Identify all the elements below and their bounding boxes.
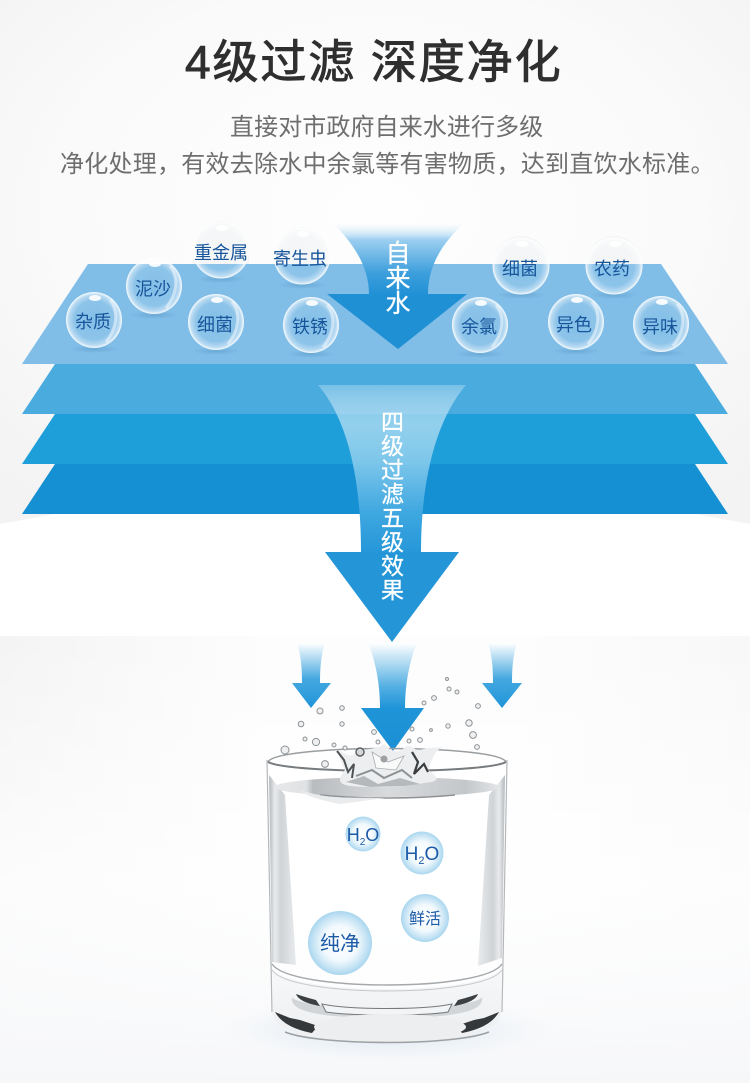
- ball: H2O small: [346, 816, 380, 852]
- glass outer edges: [267, 760, 507, 1012]
- background: upper grey area: [0, 0, 750, 530]
- subtitle: 净化处理，有效去除水中余氯等有害物质，达到直饮水标准。: [60, 151, 715, 178]
- bubble: 泥沙: 泥沙: [135, 279, 171, 299]
- glass left wall: [269, 775, 296, 965]
- title: 4级过滤 深度净化: [185, 36, 562, 88]
- bubble: 细菌 left: 细菌: [197, 315, 233, 335]
- background: lower grey area: [0, 636, 750, 1083]
- ball: H2O small: 2: [360, 837, 366, 848]
- bubble: 杂质: [66, 292, 122, 353]
- arrow text: 过: [381, 457, 404, 483]
- ball: H2O small: H: [347, 825, 360, 845]
- arrow text: 五: [381, 505, 404, 531]
- bubbles: contaminants: [66, 221, 689, 358]
- bubble: 铁锈: 铁锈: [292, 317, 328, 337]
- layer 4: [22, 464, 728, 514]
- arrow: small right: [482, 643, 522, 708]
- water splash: [336, 744, 444, 787]
- arrow text: 效: [381, 553, 404, 579]
- arrow: small left: [292, 643, 331, 708]
- layer 3: [22, 414, 728, 464]
- arrow text: 滤: [381, 481, 404, 507]
- bubble: 农药: [586, 236, 642, 299]
- ball: H2O large: [400, 832, 444, 874]
- bubble: 异味: [633, 296, 689, 357]
- bubble: 异色: 异色: [556, 315, 592, 335]
- rim front: [268, 762, 506, 771]
- bubble: 农药: 农药: [594, 259, 630, 279]
- ball: 鲜活: 鲜活: [409, 910, 441, 928]
- water glass: [267, 678, 507, 1043]
- subtitle: [60, 114, 715, 178]
- ball: H2O large: O: [425, 844, 439, 865]
- ball: H2O large: 2: [418, 855, 425, 867]
- ball: H2O large: H: [405, 844, 418, 865]
- arrow text: 来: [385, 265, 411, 293]
- water droplets: [281, 678, 480, 767]
- arrow: four-stage filtration: [318, 385, 466, 642]
- rim back: [268, 748, 506, 762]
- bubble: 余氯: [452, 297, 508, 358]
- bubble: 异色: [548, 294, 604, 355]
- arrow: tap water: [327, 222, 467, 349]
- ball: 鲜活: [401, 894, 449, 942]
- bubble: 寄生虫: [273, 227, 330, 289]
- subtitle: 直接对市政府自来水进行多级: [230, 114, 543, 141]
- bubble: 重金属: [192, 221, 250, 283]
- layer 2: [22, 364, 728, 414]
- bubble: 泥沙: [126, 258, 182, 319]
- bubble: 余氯: 余氯: [461, 317, 497, 337]
- water surface: [275, 777, 499, 804]
- glass body: [267, 760, 507, 1043]
- bubble: 杂质: 杂质: [75, 312, 111, 332]
- arrow text: 自: [385, 240, 411, 268]
- bubble: 重金属: 重金属: [194, 243, 248, 263]
- arrow: centre: [361, 643, 424, 751]
- filter layers stack: [22, 264, 728, 514]
- ball: H2O small: O: [365, 825, 379, 845]
- arrow text: [381, 409, 404, 603]
- glass base: [272, 964, 502, 1043]
- glass right wall: [478, 775, 505, 966]
- bubble: 寄生虫: 寄生虫: [273, 249, 327, 269]
- bubble: 细菌 right: [492, 236, 550, 299]
- arrow text: 果: [381, 577, 404, 603]
- arrow text: 级: [381, 433, 404, 459]
- arrow text: 水: [385, 290, 411, 318]
- bubble: 细菌 left: [188, 294, 244, 355]
- arrow text: 四: [381, 409, 404, 435]
- bubble: 异味: 异味: [642, 317, 678, 337]
- ball: 纯净: [308, 911, 372, 975]
- bubble: 铁锈: [283, 297, 339, 358]
- background: white band: [0, 514, 750, 636]
- arrow text: [385, 240, 411, 318]
- bubble: 细菌 right: 细菌: [502, 259, 538, 279]
- arrow text: 级: [381, 529, 404, 555]
- layer 1: [22, 264, 728, 364]
- glass floor shadow: [217, 998, 557, 1062]
- ball: 纯净: 纯净: [320, 932, 360, 955]
